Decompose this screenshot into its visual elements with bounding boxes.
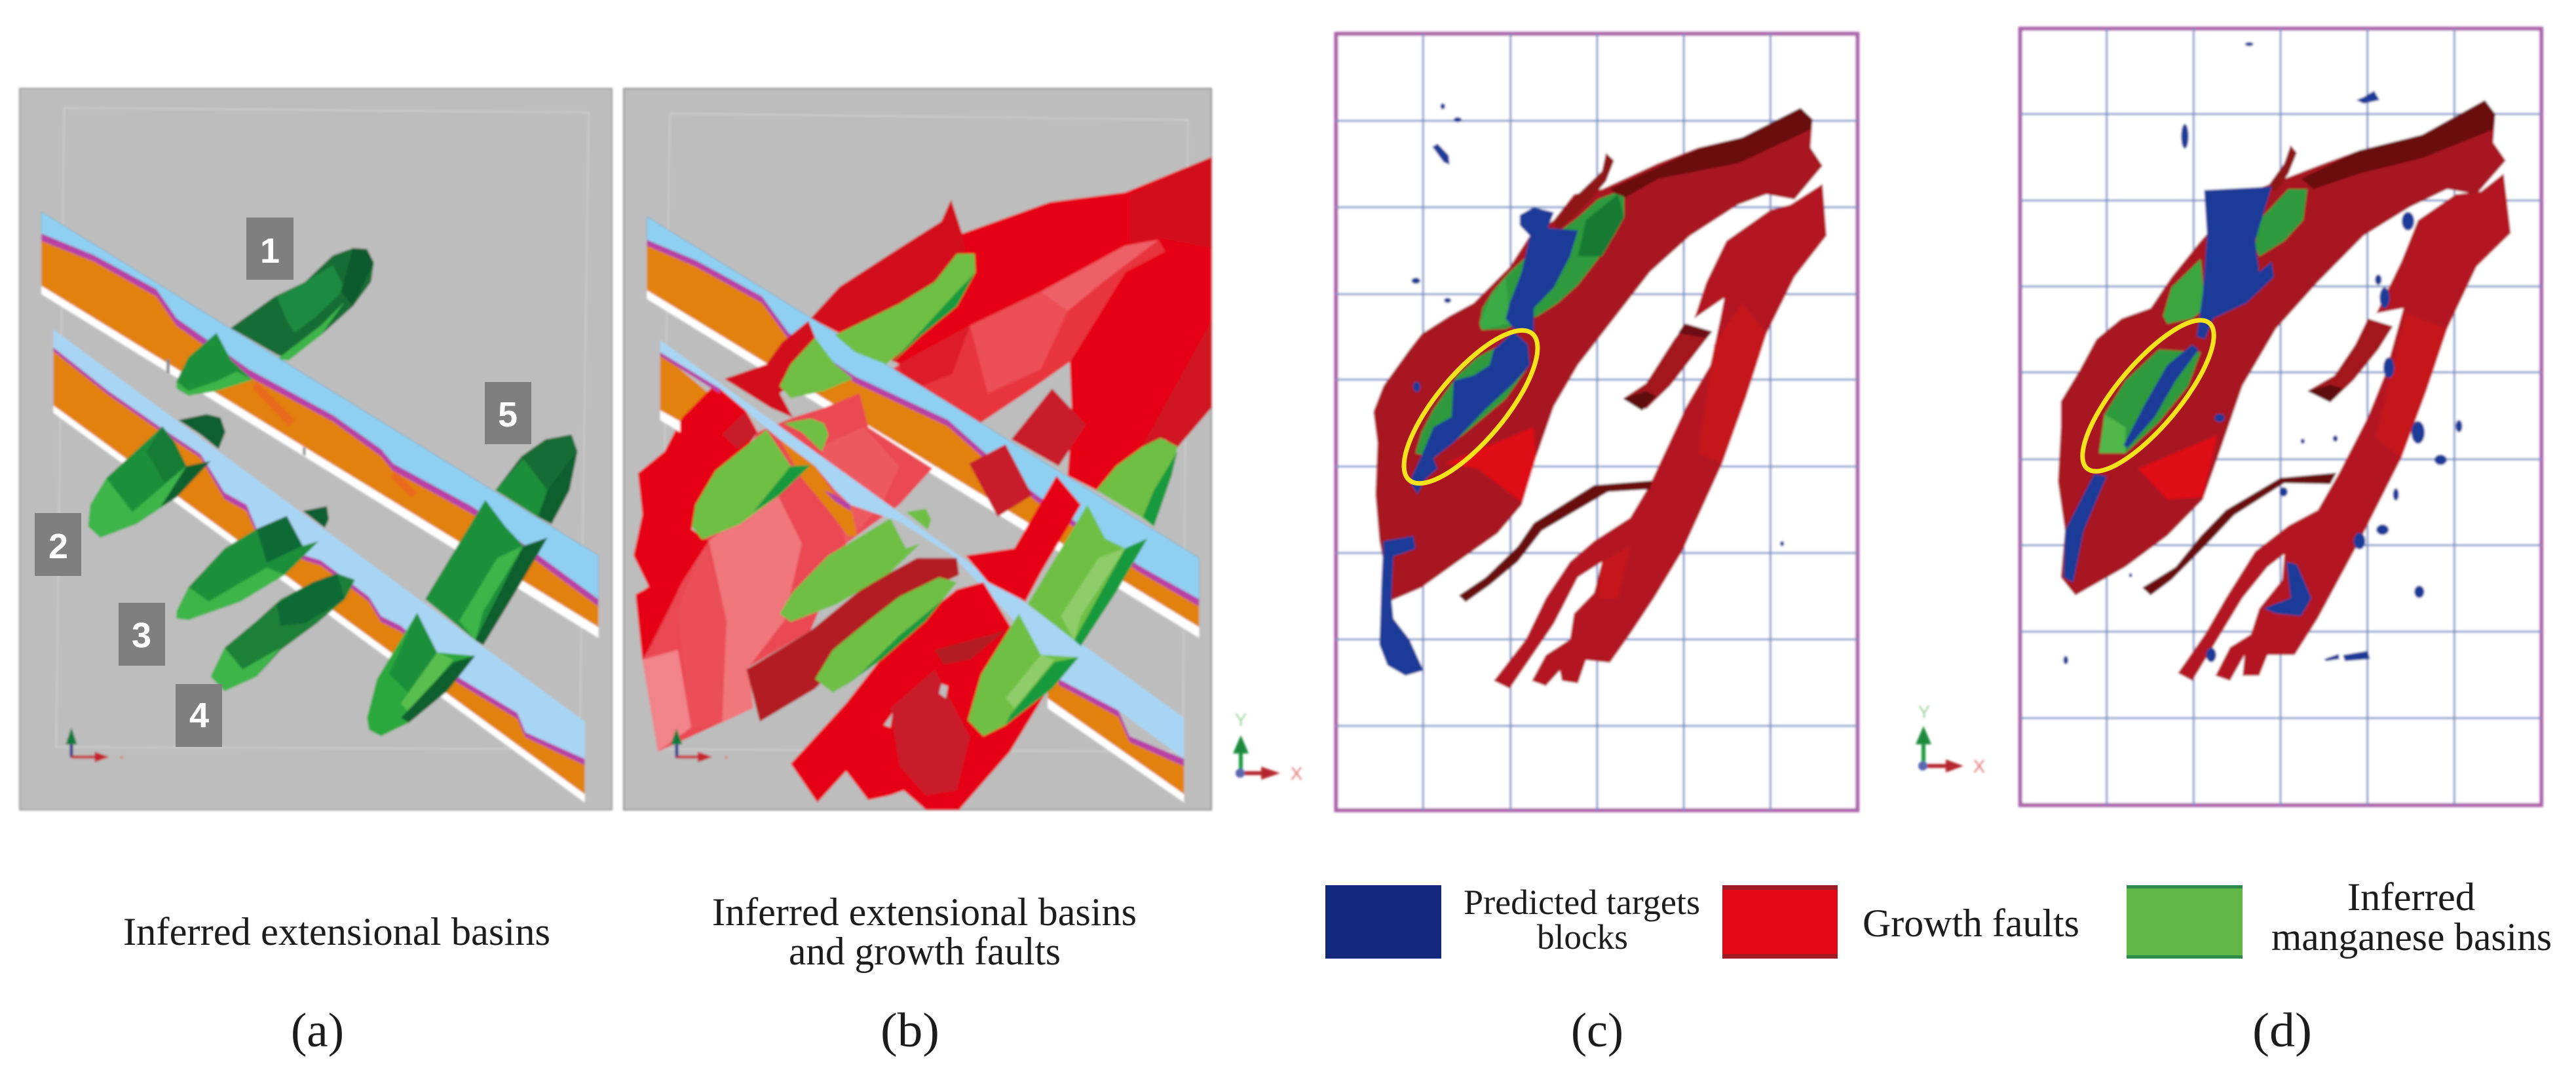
- mini axis: [66, 727, 123, 762]
- legend: predicted targets blocks: blocks: [1537, 917, 1628, 957]
- axis triad between panels b and c: [1233, 710, 1303, 784]
- basin 1 front part: [176, 333, 253, 396]
- axis triad between panels c and d: [1916, 702, 1986, 776]
- label 1: 1: [260, 231, 280, 271]
- caption a: Inferred extensional basins: [123, 910, 550, 953]
- basin 2: [692, 419, 828, 540]
- legend: predicted targets blocks: [1325, 883, 1700, 959]
- axis triad between panels b and c: X: [1291, 763, 1303, 784]
- panel c: predicted target blocks on faults and basins: [1336, 34, 1857, 811]
- cross-section 2 remains: [660, 340, 1184, 803]
- legend: predicted targets blocks: Predicted targets: [1464, 883, 1700, 922]
- basin 5 front part: [367, 613, 475, 736]
- legend: inferred manganese basins: Inferred: [2347, 875, 2475, 919]
- panel d: predicted target blocks on faults and basins: [2020, 29, 2541, 805]
- basin 1: [780, 254, 975, 398]
- caption b: and growth faults: [789, 930, 1061, 973]
- growth fault left bright lobe: [634, 321, 824, 660]
- label 3: [119, 603, 165, 666]
- inferred basins: [1416, 193, 1624, 458]
- yellow ellipse highlight panel c: [1383, 312, 1559, 502]
- growth fault lower mass: [791, 582, 1046, 810]
- legend: inferred manganese basins: manganese basins: [2271, 915, 2552, 959]
- label 2: [35, 513, 81, 576]
- growth fault dark lower band: [746, 558, 959, 721]
- label 4: [176, 684, 222, 747]
- growth fault right branch: [1494, 184, 1827, 689]
- growth fault thin segment: [2142, 473, 2337, 596]
- growth fault short segment: [1623, 324, 1713, 411]
- growth fault thin segment: [1459, 480, 1652, 602]
- label 2: 2: [48, 527, 68, 566]
- cross-section 1: [41, 212, 598, 638]
- growth fault rear band: [810, 157, 1211, 490]
- label 4: 4: [189, 696, 209, 735]
- axis triad between panels b and c: Y: [1235, 710, 1247, 730]
- legend: growth faults: Growth faults: [1863, 902, 2079, 945]
- label 3: 3: [132, 616, 151, 655]
- panel letter a: (a): [291, 1004, 344, 1058]
- yellow ellipse highlight panel d: [2063, 303, 2233, 489]
- growth fault short segment: [2307, 318, 2393, 402]
- legend: inferred manganese basins: [2127, 875, 2552, 959]
- label 1: [246, 218, 294, 280]
- growth fault main body: [1373, 108, 1823, 601]
- axis triad between panels c and d: X: [1973, 756, 1986, 776]
- orange remnant of cross-section 2 left: [660, 353, 709, 421]
- basin 4: [815, 577, 957, 693]
- basin 5: [968, 438, 1177, 736]
- axis triad between panels c and d: Y: [1918, 702, 1931, 722]
- growth fault pale fan: [635, 393, 932, 752]
- panel a: inferred extensional basins 3D view: [20, 88, 612, 810]
- basin 2 front part: [88, 427, 210, 538]
- cross-section 1: [647, 217, 1199, 638]
- cross-section 2: [53, 330, 585, 803]
- label 5: 5: [498, 395, 518, 434]
- growth fault main body: [2058, 100, 2506, 596]
- caption b: [712, 890, 1137, 973]
- panel letter b: (b): [881, 1004, 939, 1058]
- basin 4: [210, 573, 355, 691]
- basin 3: [780, 508, 931, 622]
- predicted target blocks: [2063, 42, 2462, 664]
- growth fault dark blocks: [969, 389, 1086, 517]
- basin 1 rear part: [231, 248, 374, 360]
- legend: growth faults: [1722, 885, 2079, 959]
- growth fault central block: [966, 476, 1081, 601]
- basin 2 rear part: [178, 414, 225, 449]
- inferred basins: [2099, 189, 2307, 453]
- panel b: inferred extensional basins and growth faults 3D view: [624, 88, 1211, 810]
- basin 3 front part: [176, 516, 319, 620]
- panel letter d: (d): [2252, 1004, 2312, 1058]
- caption b: Inferred extensional basins: [712, 890, 1137, 934]
- growth fault right branch: [2178, 174, 2510, 681]
- basin 5 rear part: [495, 434, 578, 524]
- panel letter c: (c): [1571, 1004, 1623, 1058]
- basin 3 rear part: [303, 506, 329, 528]
- label 5: [485, 382, 531, 444]
- basin 5 middle part: [425, 500, 548, 645]
- mini axis: [671, 729, 727, 762]
- predicted target blocks: [1380, 103, 1784, 676]
